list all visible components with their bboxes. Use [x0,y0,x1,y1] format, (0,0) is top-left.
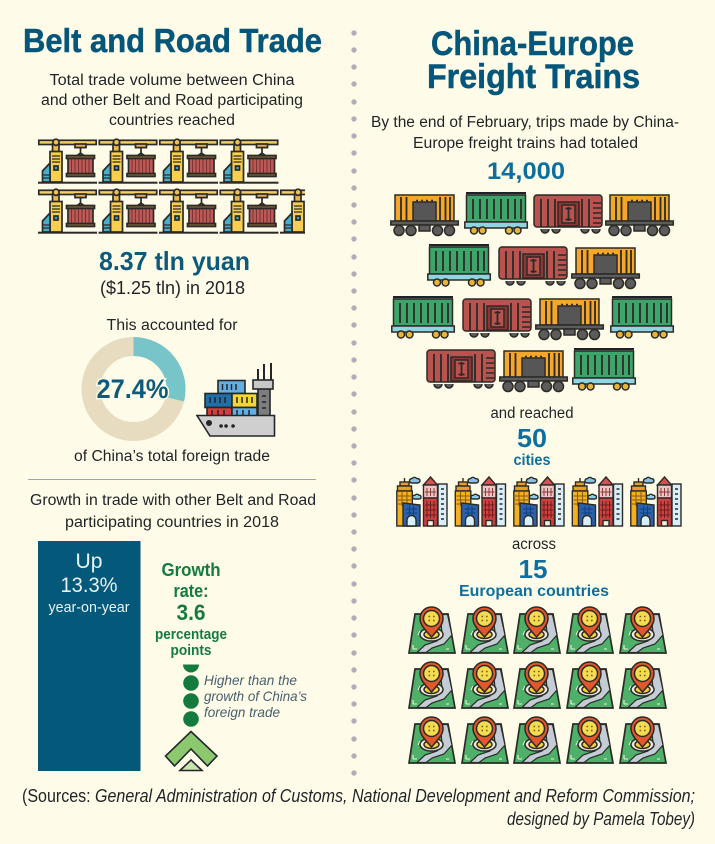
panel: growth in trade [30,492,316,771]
text block: trade volume intro: and other Belt and Road participating [41,92,303,109]
heading: China-Europe Freight Trains: China-Europe [431,25,634,63]
icon detail: ship portholes [221,424,233,428]
icons: container cranes [38,139,339,234]
dotted vertical divider [351,30,357,776]
text: this accounted for: This accounted for [106,317,238,334]
text: and reached: and reached [490,405,574,422]
text block: trade volume intro: Total trade volume between China [50,72,295,89]
text block: growth rate 3.6 percentage points: Growth [162,559,220,580]
icon: cargo ship [197,363,274,436]
note: higher than foreign trade growth: Higher than the [204,672,297,688]
panel: Belt and Road Trade [23,22,339,465]
figure: 14,000: 14,000 [487,158,565,185]
heading: Belt and Road Trade: Belt and Road Trade [23,22,322,59]
donut chart: 27.4% [91,337,186,432]
icons: city skylines [397,477,681,526]
text block: trade volume intro [41,72,303,129]
heading: China-Europe Freight Trains: Freight Trains [427,58,640,96]
figure: 15 European countries: European countries [459,583,609,600]
bar: up 13.3% year-on-year: year-on-year [48,600,130,616]
text block: growth rate 3.6 percentage points: points [170,642,212,659]
note: higher than foreign trade growth: foreign trade [204,704,280,720]
text block: growth heading: Growth in trade with other Belt and Road [30,492,316,509]
section rule [28,479,316,480]
text block: growth heading [30,492,316,531]
donut chart: 27.4%: 27.4% [96,374,168,404]
panel: China-Europe Freight Trains [371,25,681,763]
bar: up 13.3% year-on-year [38,541,140,771]
icons: freight trains [391,192,673,392]
source note [22,786,695,829]
figure: 8.37 tln yuan: 8.37 tln yuan [99,246,250,276]
bar: up 13.3% year-on-year: 13.3% [60,574,118,597]
text block: trade volume intro: countries reached [109,112,235,129]
text block: growth heading: participating countries in 2018 [65,514,279,531]
note: higher than foreign trade growth: growth of China’s [204,688,307,704]
text block: growth rate 3.6 percentage points: percentage [155,626,227,643]
text block: trips intro: By the end of February, trips made by China- [371,114,679,131]
figure: 50 cities: cities [514,452,550,469]
icons: map pins [409,607,666,763]
figure: 15 European countries [459,554,609,600]
text block: trips intro [371,114,679,152]
text: of China's total foreign trade: of China’s total foreign trade [74,448,270,465]
icon: dotted upward arrow [166,664,217,770]
text: $1.25 tln in 2018: ($1.25 tln) in 2018 [100,278,245,298]
figure: 50 cities [514,423,550,469]
text block: trips intro: Europe freight trains had totaled [413,135,638,152]
text block: growth rate 3.6 percentage points: 3.6 [176,600,206,625]
heading: China-Europe Freight Trains [427,25,640,96]
text: across: across [512,536,556,553]
text block: growth rate 3.6 percentage points: rate: [174,580,208,601]
note: higher than foreign trade growth [204,672,307,720]
text block: growth rate 3.6 percentage points [155,559,227,659]
figure: 50 cities: 50 [517,423,547,453]
figure: 15 European countries: 15 [518,554,548,584]
bar: up 13.3% year-on-year: Up [76,550,102,573]
